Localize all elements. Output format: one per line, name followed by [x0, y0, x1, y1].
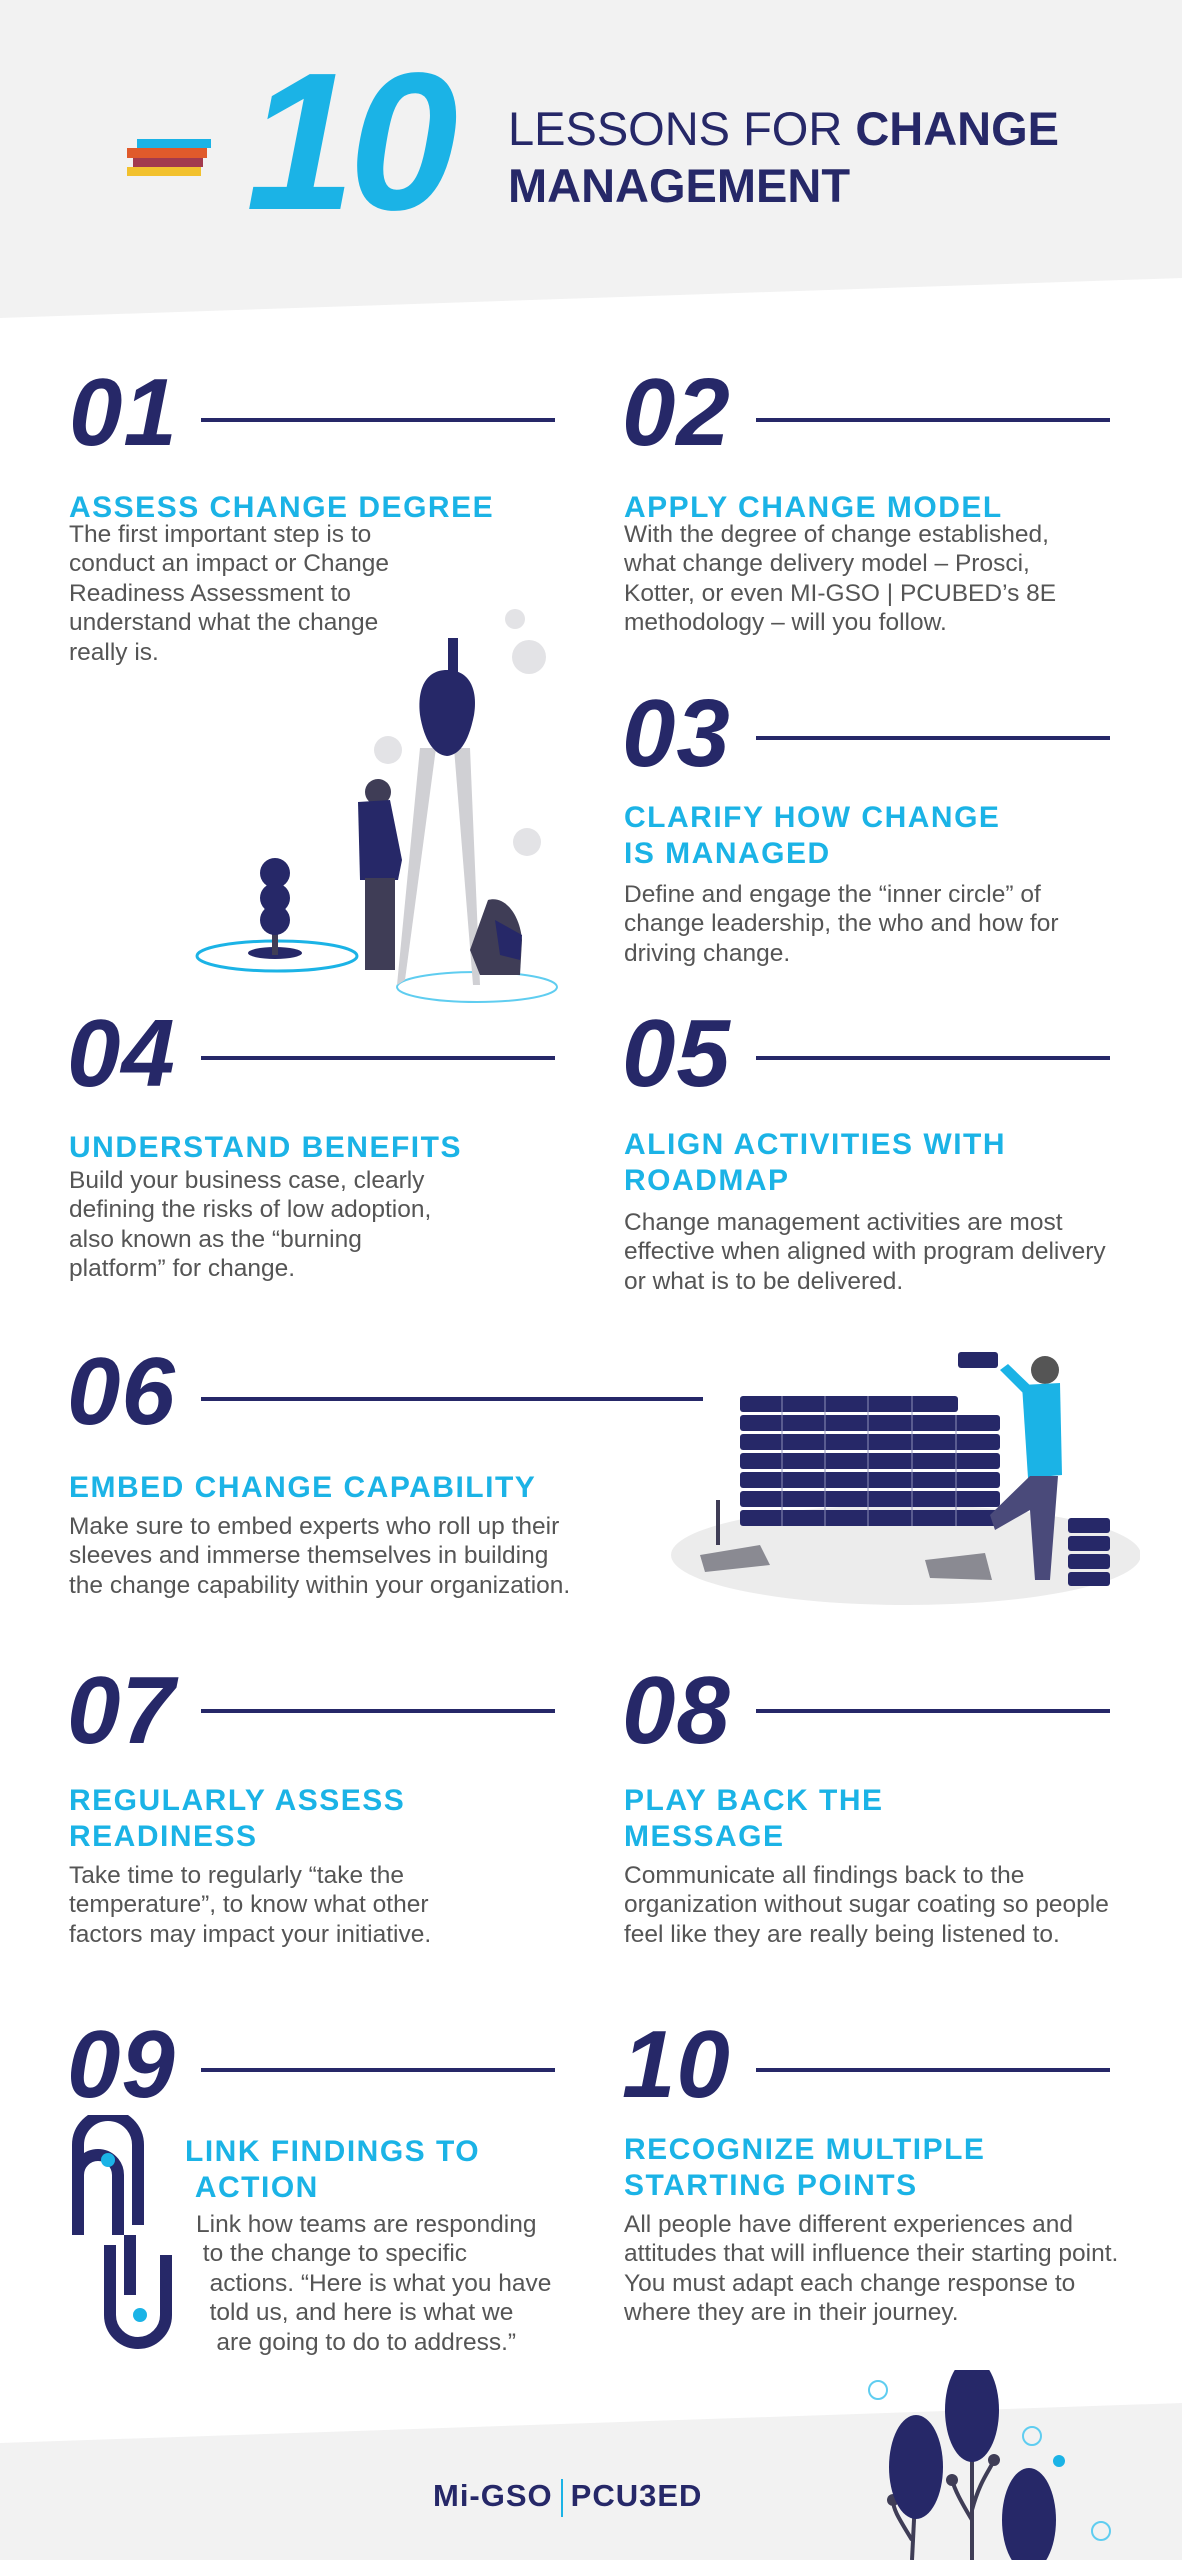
body 09: actions. “Here is what you have: [210, 2270, 551, 2297]
heading 03: IS MANAGED: [624, 837, 831, 870]
body 06: the change capability within your organization.: [69, 1572, 570, 1599]
body 10: [624, 2211, 1118, 2326]
heading 02: APPLY CHANGE MODEL: [624, 491, 1003, 524]
heading 05: ALIGN ACTIVITIES WITH: [624, 1128, 1006, 1161]
heading 03: CLARIFY HOW CHANGE: [624, 801, 1000, 834]
section 10: 10: [622, 2011, 731, 2118]
body 04: also known as the “burning: [69, 1226, 362, 1253]
body 02: With the degree of change established,: [624, 521, 1049, 548]
heading 08: [624, 1784, 884, 1853]
body 09: told us, and here is what we: [210, 2299, 513, 2326]
illustration: flowers: [868, 2370, 1111, 2560]
body 10: All people have different experiences and: [624, 2211, 1073, 2238]
body 08: [624, 1862, 1109, 1948]
heading 07: READINESS: [69, 1820, 258, 1853]
heading 08: MESSAGE: [624, 1820, 785, 1853]
body 09: are going to do to address.”: [216, 2329, 516, 2356]
body 01: understand what the change: [69, 609, 378, 636]
body 04: [69, 1167, 431, 1282]
section 07: 07: [67, 1657, 176, 1764]
body 03: change leadership, the who and how for: [624, 910, 1058, 937]
body 07: [69, 1862, 431, 1948]
section 06: 06: [67, 1338, 176, 1445]
icon: chain link: [72, 2115, 172, 2349]
body 02: what change delivery model – Prosci,: [624, 550, 1030, 577]
header background: [0, 0, 1182, 318]
body 02: [624, 521, 1056, 636]
body 06: Make sure to embed experts who roll up their: [69, 1513, 559, 1540]
body 02: methodology – will you follow.: [624, 609, 947, 636]
body 08: organization without sugar coating so people: [624, 1891, 1109, 1918]
heading 07: [69, 1784, 405, 1853]
body 06: [69, 1513, 570, 1599]
heading 07: REGULARLY ASSESS: [69, 1784, 405, 1817]
heading 05: [624, 1128, 1006, 1197]
body 09: Link how teams are responding: [196, 2211, 536, 2238]
heading 10: STARTING POINTS: [624, 2169, 918, 2202]
body 08: Communicate all findings back to the: [624, 1862, 1024, 1889]
footer background: [0, 2403, 1182, 2560]
heading 05: ROADMAP: [624, 1164, 790, 1197]
title text: MANAGEMENT: [508, 159, 850, 212]
body 10: You must adapt each change response to: [624, 2270, 1075, 2297]
heading 09: [185, 2135, 480, 2204]
body 05: [624, 1209, 1106, 1295]
body 08: feel like they are really being listened to.: [624, 1921, 1060, 1948]
section 04: 04: [67, 1000, 176, 1107]
body 01: really is.: [69, 639, 159, 666]
body 10: attitudes that will influence their starting point.: [624, 2240, 1118, 2267]
section 02: 02: [622, 359, 731, 466]
body 01: Readiness Assessment to: [69, 580, 351, 607]
icon: flag stripes: [127, 139, 211, 176]
body 04: platform” for change.: [69, 1255, 295, 1282]
title number 10: 10: [246, 32, 452, 251]
body 09: [196, 2211, 551, 2356]
heading 08: PLAY BACK THE: [624, 1784, 884, 1817]
body 02: Kotter, or even MI-GSO | PCUBED’s 8E: [624, 580, 1056, 607]
body 05: effective when aligned with program delivery: [624, 1238, 1106, 1265]
body 04: defining the risks of low adoption,: [69, 1196, 431, 1223]
body 09: to the change to specific: [203, 2240, 467, 2267]
footer logo: Mi-GSO PCU3ED: [433, 2478, 702, 2513]
heading 10: RECOGNIZE MULTIPLE: [624, 2133, 985, 2166]
title text: [508, 102, 1059, 212]
illustration: wall builder: [671, 1352, 1140, 1605]
heading 01: ASSESS CHANGE DEGREE: [69, 491, 494, 524]
body 05: or what is to be delivered.: [624, 1268, 903, 1295]
body 07: factors may impact your initiative.: [69, 1921, 431, 1948]
heading 06: EMBED CHANGE CAPABILITY: [69, 1471, 536, 1504]
body 01: conduct an impact or Change: [69, 550, 389, 577]
body 01: The first important step is to: [69, 521, 371, 548]
body 03: Define and engage the “inner circle” of: [624, 881, 1041, 908]
section 05: 05: [622, 1000, 731, 1107]
illustration: compass with people: [196, 609, 558, 1003]
body 01: [69, 521, 389, 666]
heading 09: LINK FINDINGS TO: [185, 2135, 480, 2168]
heading 10: [624, 2133, 985, 2202]
body 03: driving change.: [624, 940, 790, 967]
heading 03: [624, 801, 1000, 870]
section 03: 03: [622, 680, 731, 787]
section 01: 01: [69, 359, 178, 466]
body 06: sleeves and immerse themselves in building: [69, 1542, 548, 1569]
section 09: 09: [67, 2011, 176, 2118]
heading 09: ACTION: [195, 2171, 319, 2204]
body 10: where they are in their journey.: [624, 2299, 959, 2326]
body 03: [624, 881, 1058, 967]
section 08: 08: [622, 1657, 731, 1764]
title text: LESSONS FOR CHANGE: [508, 102, 1059, 155]
heading 04: UNDERSTAND BENEFITS: [69, 1131, 462, 1164]
body 07: temperature”, to know what other: [69, 1891, 429, 1918]
body 05: Change management activities are most: [624, 1209, 1062, 1236]
body 07: Take time to regularly “take the: [69, 1862, 404, 1889]
body 04: Build your business case, clearly: [69, 1167, 424, 1194]
